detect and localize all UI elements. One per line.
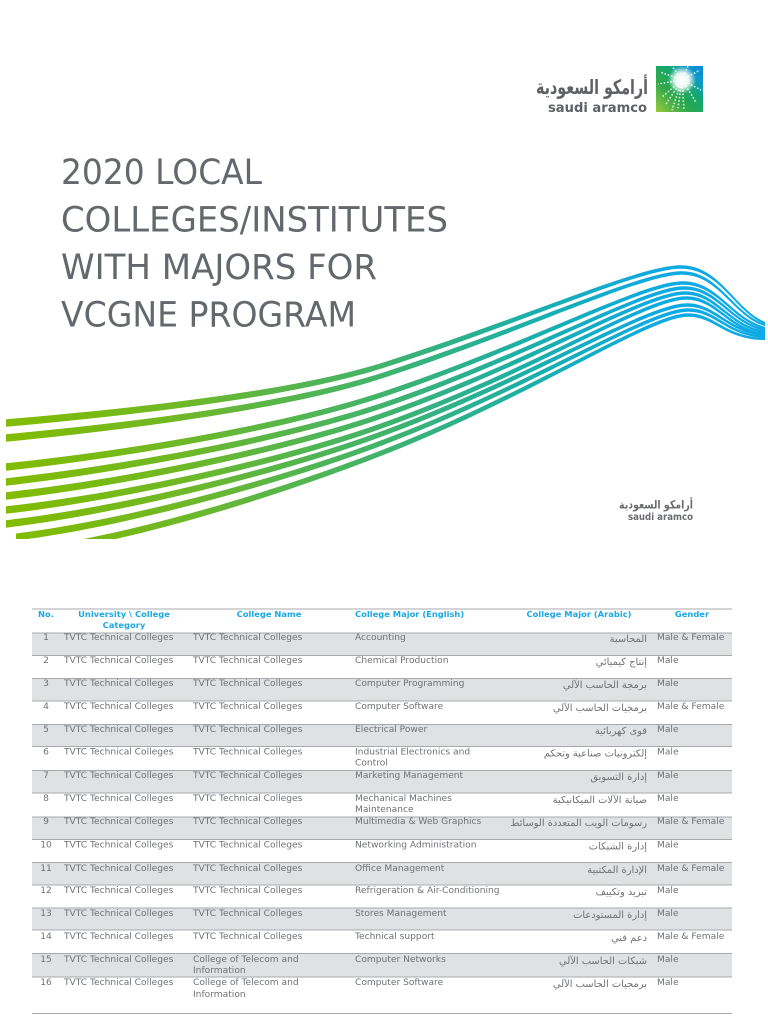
row 15: Male	[657, 955, 679, 965]
row 10: Male	[657, 840, 679, 850]
row 11: 11	[40, 864, 52, 874]
row 1: المحاسبة	[610, 634, 647, 645]
row 8	[32, 793, 732, 815]
row 9: Male & Female	[657, 817, 725, 827]
row 4: 4	[43, 702, 49, 712]
row 12: Refrigeration & Air-Conditioning	[355, 886, 500, 896]
row 3: Computer Programming	[355, 679, 464, 689]
row 1: TVTC Technical Colleges	[63, 633, 174, 643]
row 13: Stores Management	[355, 909, 447, 919]
row 6: Control	[355, 758, 388, 768]
row 10	[32, 840, 732, 852]
row 14: Male & Female	[657, 932, 725, 942]
row 5: قوى كهربائية	[595, 726, 647, 737]
row 3: 3	[43, 679, 49, 689]
title: COLLEGES/INSTITUTES	[61, 200, 448, 240]
row 2: 2	[43, 656, 49, 666]
logo: small saudi aramco: saudi aramco	[628, 512, 693, 523]
row 3: Male	[657, 679, 679, 689]
row 16	[32, 977, 732, 1014]
row 2	[32, 656, 732, 668]
row 12: 12	[40, 886, 52, 896]
row 15: 15	[40, 955, 52, 965]
row 7: TVTC Technical Colleges	[192, 771, 303, 781]
row 11: TVTC Technical Colleges	[192, 864, 303, 874]
table header	[32, 609, 732, 630]
row 9: Multimedia & Web Graphics	[355, 817, 482, 827]
row 12: TVTC Technical Colleges	[192, 886, 303, 896]
row 11	[32, 862, 732, 885]
row 10: Networking Administration	[355, 840, 476, 850]
logo: saudi aramco header	[536, 66, 703, 116]
row 4: TVTC Technical Colleges	[63, 702, 174, 712]
row 5: TVTC Technical Colleges	[63, 725, 174, 735]
row 11: Male & Female	[657, 864, 725, 874]
row 15: College of Telecom and	[193, 955, 299, 965]
row 8: TVTC Technical Colleges	[63, 794, 174, 804]
row 6	[32, 746, 732, 768]
logo: small saudi aramco	[619, 496, 693, 523]
row 1	[32, 633, 732, 656]
row 15	[32, 954, 732, 977]
row 15: TVTC Technical Colleges	[63, 955, 174, 965]
logo english wordmark: saudi aramco	[548, 100, 647, 116]
logo arabic wordmark: أرامكو السعودية	[536, 73, 648, 99]
row 6: 6	[43, 748, 49, 758]
table header: Category	[103, 620, 146, 630]
title: WITH MAJORS FOR	[61, 248, 377, 288]
row 7: TVTC Technical Colleges	[63, 771, 174, 781]
row 13: إدارة المستودعات	[573, 910, 647, 921]
table header: College Name	[237, 609, 302, 619]
row 2: Chemical Production	[355, 656, 448, 666]
row 9: 9	[43, 817, 49, 827]
title: 2020 LOCAL	[61, 153, 262, 193]
row 16: College of Telecom and	[193, 978, 299, 988]
row 12: TVTC Technical Colleges	[63, 886, 174, 896]
row 9: TVTC Technical Colleges	[192, 817, 303, 827]
row 8: Maintenance	[355, 805, 414, 815]
row 9: رسومات الويب المتعددة الوسائط	[510, 818, 647, 829]
row 6: TVTC Technical Colleges	[192, 748, 303, 758]
row 13: Male	[657, 909, 679, 919]
row 1: Accounting	[355, 633, 406, 643]
table header: College Major (English)	[355, 609, 464, 619]
row 1: TVTC Technical Colleges	[192, 633, 303, 643]
row 16: TVTC Technical Colleges	[63, 978, 174, 988]
row 14	[32, 930, 732, 944]
row 12: Male	[657, 886, 679, 896]
row 16: Male	[657, 978, 679, 988]
row 8: TVTC Technical Colleges	[192, 794, 303, 804]
row 12	[32, 885, 732, 898]
table header: No.	[38, 609, 54, 619]
row 10: إدارة الشبكات	[589, 842, 647, 852]
row 3: برمجة الحاسب الآلي	[563, 679, 647, 691]
row 6: TVTC Technical Colleges	[63, 748, 174, 758]
row 7: Male	[657, 771, 679, 781]
row 6: Male	[657, 748, 679, 758]
row 4: برمجيات الحاسب الآلي	[553, 702, 647, 714]
row 7	[32, 770, 732, 793]
row 11: TVTC Technical Colleges	[63, 864, 174, 874]
row 14: دعم فني	[611, 933, 647, 944]
row 10: TVTC Technical Colleges	[63, 840, 174, 850]
icon: aramco star square	[656, 66, 703, 112]
row 2: إنتاج كيميائي	[596, 657, 647, 668]
row 13	[32, 908, 732, 930]
row 4: Computer Software	[355, 702, 444, 712]
row 13: TVTC Technical Colleges	[192, 909, 303, 919]
row 4: Male & Female	[657, 702, 725, 712]
logo: small saudi aramco: أرامكو السعودية	[619, 496, 693, 512]
row 7: Marketing Management	[355, 771, 464, 781]
table header: College Major (Arabic)	[527, 609, 632, 619]
row 14: Technical support	[354, 932, 435, 942]
row 13: 13	[40, 909, 52, 919]
row 14: 14	[40, 932, 52, 942]
table: colleges and majors	[32, 609, 732, 1014]
row 5	[32, 724, 732, 746]
title	[61, 153, 448, 336]
row 7: إدارة التسويق	[590, 772, 647, 783]
row 15: Computer Networks	[355, 955, 446, 965]
row 2: TVTC Technical Colleges	[192, 656, 303, 666]
row 3	[32, 678, 732, 701]
row 8: صيانة الآلات الميكانيكية	[553, 794, 647, 806]
row 2: Male	[657, 656, 679, 666]
row 8: 8	[43, 794, 49, 804]
row 2: TVTC Technical Colleges	[63, 656, 174, 666]
row 16: Information	[193, 990, 246, 1000]
row 16: 16	[40, 978, 52, 988]
row 16: Computer Software	[355, 978, 444, 988]
row 4	[32, 701, 732, 714]
row 8: Mechanical Machines	[355, 794, 452, 804]
row 12: تبريد وتكييف	[596, 887, 647, 898]
table header: University \ College	[78, 609, 170, 619]
row 11: Office Management	[355, 864, 445, 874]
row 15: Information	[193, 966, 246, 976]
row 5: Electrical Power	[355, 725, 427, 735]
row 5: Male	[657, 725, 679, 735]
row 11: الإدارة المكتبية	[587, 865, 647, 876]
row 10: TVTC Technical Colleges	[192, 840, 303, 850]
row 16: برمجيات الحاسب الآلي	[553, 978, 647, 990]
row 7: 7	[43, 771, 49, 781]
row 3: TVTC Technical Colleges	[63, 679, 174, 689]
row 9: TVTC Technical Colleges	[63, 817, 174, 827]
row 15: شبكات الحاسب الآلي	[559, 955, 647, 967]
row 13: TVTC Technical Colleges	[63, 909, 174, 919]
ribbon wave graphic	[6, 265, 765, 559]
row 5: 5	[43, 725, 49, 735]
row 8: Male	[657, 794, 679, 804]
title: VCGNE PROGRAM	[61, 296, 356, 336]
row 6: Industrial Electronics and	[355, 748, 470, 758]
table header: Gender	[675, 609, 710, 619]
row 14: TVTC Technical Colleges	[63, 932, 174, 942]
row 4: TVTC Technical Colleges	[192, 702, 303, 712]
row 14: TVTC Technical Colleges	[192, 932, 303, 942]
row 9	[32, 817, 732, 840]
row 5: TVTC Technical Colleges	[192, 725, 303, 735]
row 6: إلكترونيات صناعية وتحكم	[544, 748, 647, 760]
row 1: 1	[43, 633, 49, 643]
row 10: 10	[40, 840, 52, 850]
row 1: Male & Female	[657, 633, 725, 643]
row 3: TVTC Technical Colleges	[192, 679, 303, 689]
